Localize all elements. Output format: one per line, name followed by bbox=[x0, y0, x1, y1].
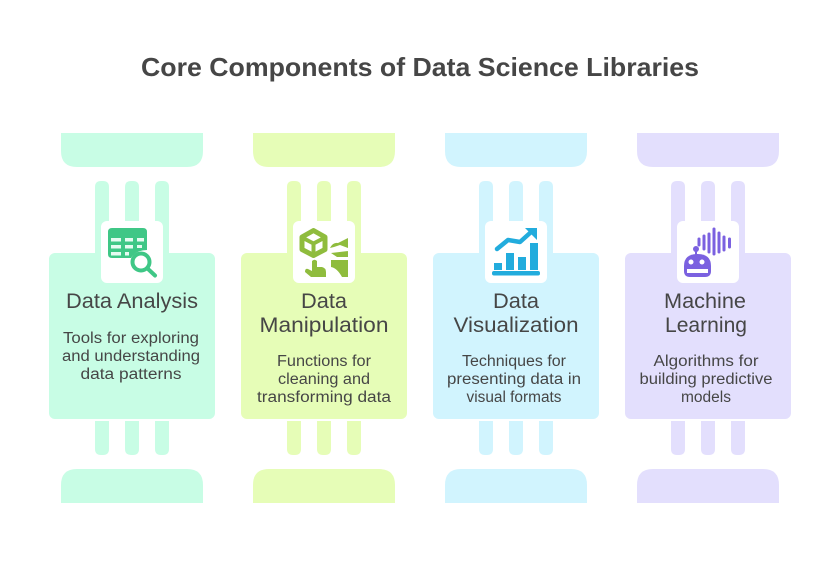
text: machine learning description bbox=[640, 353, 772, 406]
heading: machine learning bbox=[664, 290, 747, 337]
heading: machine learning: Machine bbox=[664, 290, 746, 313]
heading: data manipulation: Data bbox=[301, 290, 347, 313]
text: data manipulation description bbox=[257, 353, 391, 406]
panel: data analysis bbox=[49, 133, 215, 503]
text: machine learning description: models bbox=[681, 389, 731, 406]
icon: table with magnifier bbox=[108, 228, 155, 276]
title: Core Components of Data Science Libraries bbox=[141, 52, 699, 82]
text: data analysis description bbox=[62, 330, 200, 383]
heading: machine learning: Learning bbox=[665, 314, 747, 337]
icon: bar chart with rising arrow bbox=[492, 228, 540, 276]
heading: data visualization: Visualization bbox=[454, 314, 578, 337]
heading: data manipulation bbox=[260, 290, 388, 337]
text: data visualization description: Techniques for bbox=[462, 353, 566, 370]
heading: data analysis: Data Analysis bbox=[66, 290, 198, 313]
panel: machine learning bbox=[625, 133, 791, 503]
text: data visualization description: visual formats bbox=[466, 389, 562, 406]
panel: data visualization bbox=[433, 133, 599, 503]
text: machine learning description: Algorithms for bbox=[654, 353, 758, 370]
panel: data manipulation bbox=[241, 133, 407, 503]
text: data manipulation description: cleaning and bbox=[278, 371, 370, 388]
heading: data visualization: Data bbox=[493, 290, 539, 313]
heading: data visualization bbox=[454, 290, 578, 337]
text: data visualization description bbox=[447, 353, 581, 406]
text: machine learning description: building predictive bbox=[640, 371, 772, 388]
text: data manipulation description: Functions for bbox=[277, 353, 371, 370]
text: data analysis description: and understanding bbox=[62, 348, 200, 365]
text: data visualization description: presenting data in bbox=[447, 371, 581, 388]
text: data analysis description: data patterns bbox=[80, 366, 182, 383]
heading: data manipulation: Manipulation bbox=[260, 314, 388, 337]
icon: cube and hand bbox=[302, 230, 348, 277]
text: data analysis description: Tools for exploring bbox=[63, 330, 199, 347]
icon: robot and sound wave bbox=[684, 229, 730, 277]
text: data manipulation description: transforming data bbox=[257, 389, 391, 406]
